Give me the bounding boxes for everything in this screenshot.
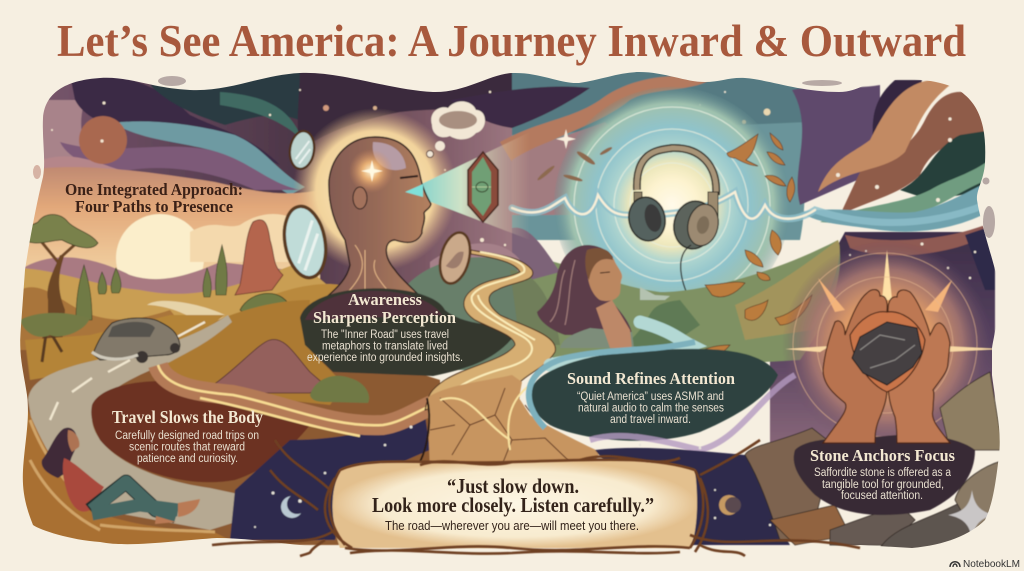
text: sound: natural audio to calm the senses [578, 402, 724, 414]
reclining woman [42, 428, 200, 524]
sky: sunset and sun [20, 167, 320, 302]
head halo [293, 108, 457, 272]
moon right [639, 444, 771, 526]
sky: left swirls [42, 72, 513, 286]
text: stone [810, 446, 955, 502]
text: travel: patience and curiosity. [137, 453, 238, 465]
ground: lower base [20, 350, 440, 545]
sky: right swirls [450, 70, 995, 450]
foliage [704, 229, 812, 351]
gold hill around rocks [165, 300, 345, 405]
left landscape [20, 256, 339, 351]
bird and autumn leaves [727, 133, 795, 202]
heading: integrated approach: Four Paths to Presence [75, 197, 233, 216]
text: awareness: experience into grounded insights. [307, 352, 463, 364]
sound rings and sun [554, 87, 784, 292]
heading: integrated approach [65, 180, 243, 216]
quote [372, 474, 654, 533]
crescent moon left [254, 426, 412, 528]
cupped hands [823, 290, 950, 443]
sage hill by the road [510, 270, 560, 345]
text: sound: Sound Refines Attention [567, 369, 736, 388]
cypress trees [76, 245, 227, 320]
mirror: large standing [282, 204, 328, 280]
cracked earth [420, 375, 600, 470]
quote: The road—wherever you are—will meet you there. [385, 518, 639, 533]
small tree by car [20, 313, 225, 380]
text: awareness: metaphors to translate lived [322, 340, 448, 352]
stream left edge [529, 342, 695, 428]
winding road [28, 314, 236, 530]
acacia tree [20, 214, 292, 345]
vintage car [92, 318, 180, 363]
plaque root frame [212, 440, 860, 556]
text: awareness: Awareness [348, 290, 422, 309]
hills under headphones [512, 228, 840, 370]
sound waveform [512, 192, 985, 222]
rocks [745, 372, 1005, 550]
side blots [33, 76, 995, 238]
plaque parchment [332, 460, 697, 548]
violet sound ribbon [590, 375, 795, 450]
thought cloud [426, 101, 485, 158]
text: stone: Saffordite stone is offered as a [814, 467, 952, 479]
text: sound: “Quiet America” uses ASMR and [577, 391, 724, 403]
flowing stream [550, 322, 690, 365]
mauve peak behind road [430, 243, 520, 272]
text: travel: Carefully designed road trips on [115, 430, 259, 442]
red rocks [213, 339, 325, 393]
text: awareness: The "Inner Road" uses travel [321, 329, 449, 341]
text: travel [112, 407, 263, 465]
light beam and gem [422, 136, 526, 237]
stone highlight [860, 335, 915, 368]
saffordite stone [852, 322, 922, 385]
text: sound: and travel inward. [610, 414, 691, 426]
root ground right of panel [230, 415, 430, 540]
green zone right of head [408, 256, 518, 371]
road highlights [445, 252, 535, 400]
heading: integrated approach: One Integrated Approach: [65, 180, 243, 199]
mirror: upper small [287, 130, 317, 170]
text: stone: Stone Anchors Focus [810, 446, 955, 465]
text: travel: scenic routes that reward [129, 442, 245, 454]
text: awareness [307, 290, 463, 364]
panel: awareness backdrop [300, 288, 515, 376]
text: awareness: Sharpens Perception [313, 308, 457, 327]
road dashes [50, 322, 205, 420]
head in profile [328, 136, 432, 296]
headphones [628, 144, 721, 291]
four-point star watermark [948, 490, 995, 540]
winding golden road [425, 250, 555, 410]
quote: Look more closely. Listen carefully.” [372, 493, 654, 517]
swirl strokes [30, 420, 215, 532]
golden ribbon [158, 365, 512, 425]
text: stone: tangible tool for grounded, [822, 479, 944, 491]
mirror: right [438, 230, 472, 286]
text: stone: focused attention. [841, 490, 923, 502]
left swirl bank [20, 395, 240, 545]
panel: sound backdrop [530, 349, 778, 441]
panel: stone backdrop [794, 435, 975, 515]
mirrors [279, 130, 475, 287]
red butte [235, 220, 283, 295]
sparkle and small leaves [536, 129, 613, 183]
text: sound [567, 369, 736, 426]
bush [310, 376, 369, 403]
quote: “Just slow down. [447, 474, 579, 498]
title: Let’s See America: A Journey Inward & Outward [57, 15, 966, 66]
woman with closed eyes [537, 245, 634, 348]
awareness panel shoulders [305, 291, 442, 320]
night sky right [595, 448, 790, 545]
NotebookLM badge: NotebookLM [963, 558, 1020, 570]
fire glow behind hands [786, 250, 992, 438]
golden ribbon highlight [158, 365, 512, 436]
text: travel: Travel Slows the Body [112, 407, 263, 427]
panel: travel backdrop [91, 381, 310, 482]
